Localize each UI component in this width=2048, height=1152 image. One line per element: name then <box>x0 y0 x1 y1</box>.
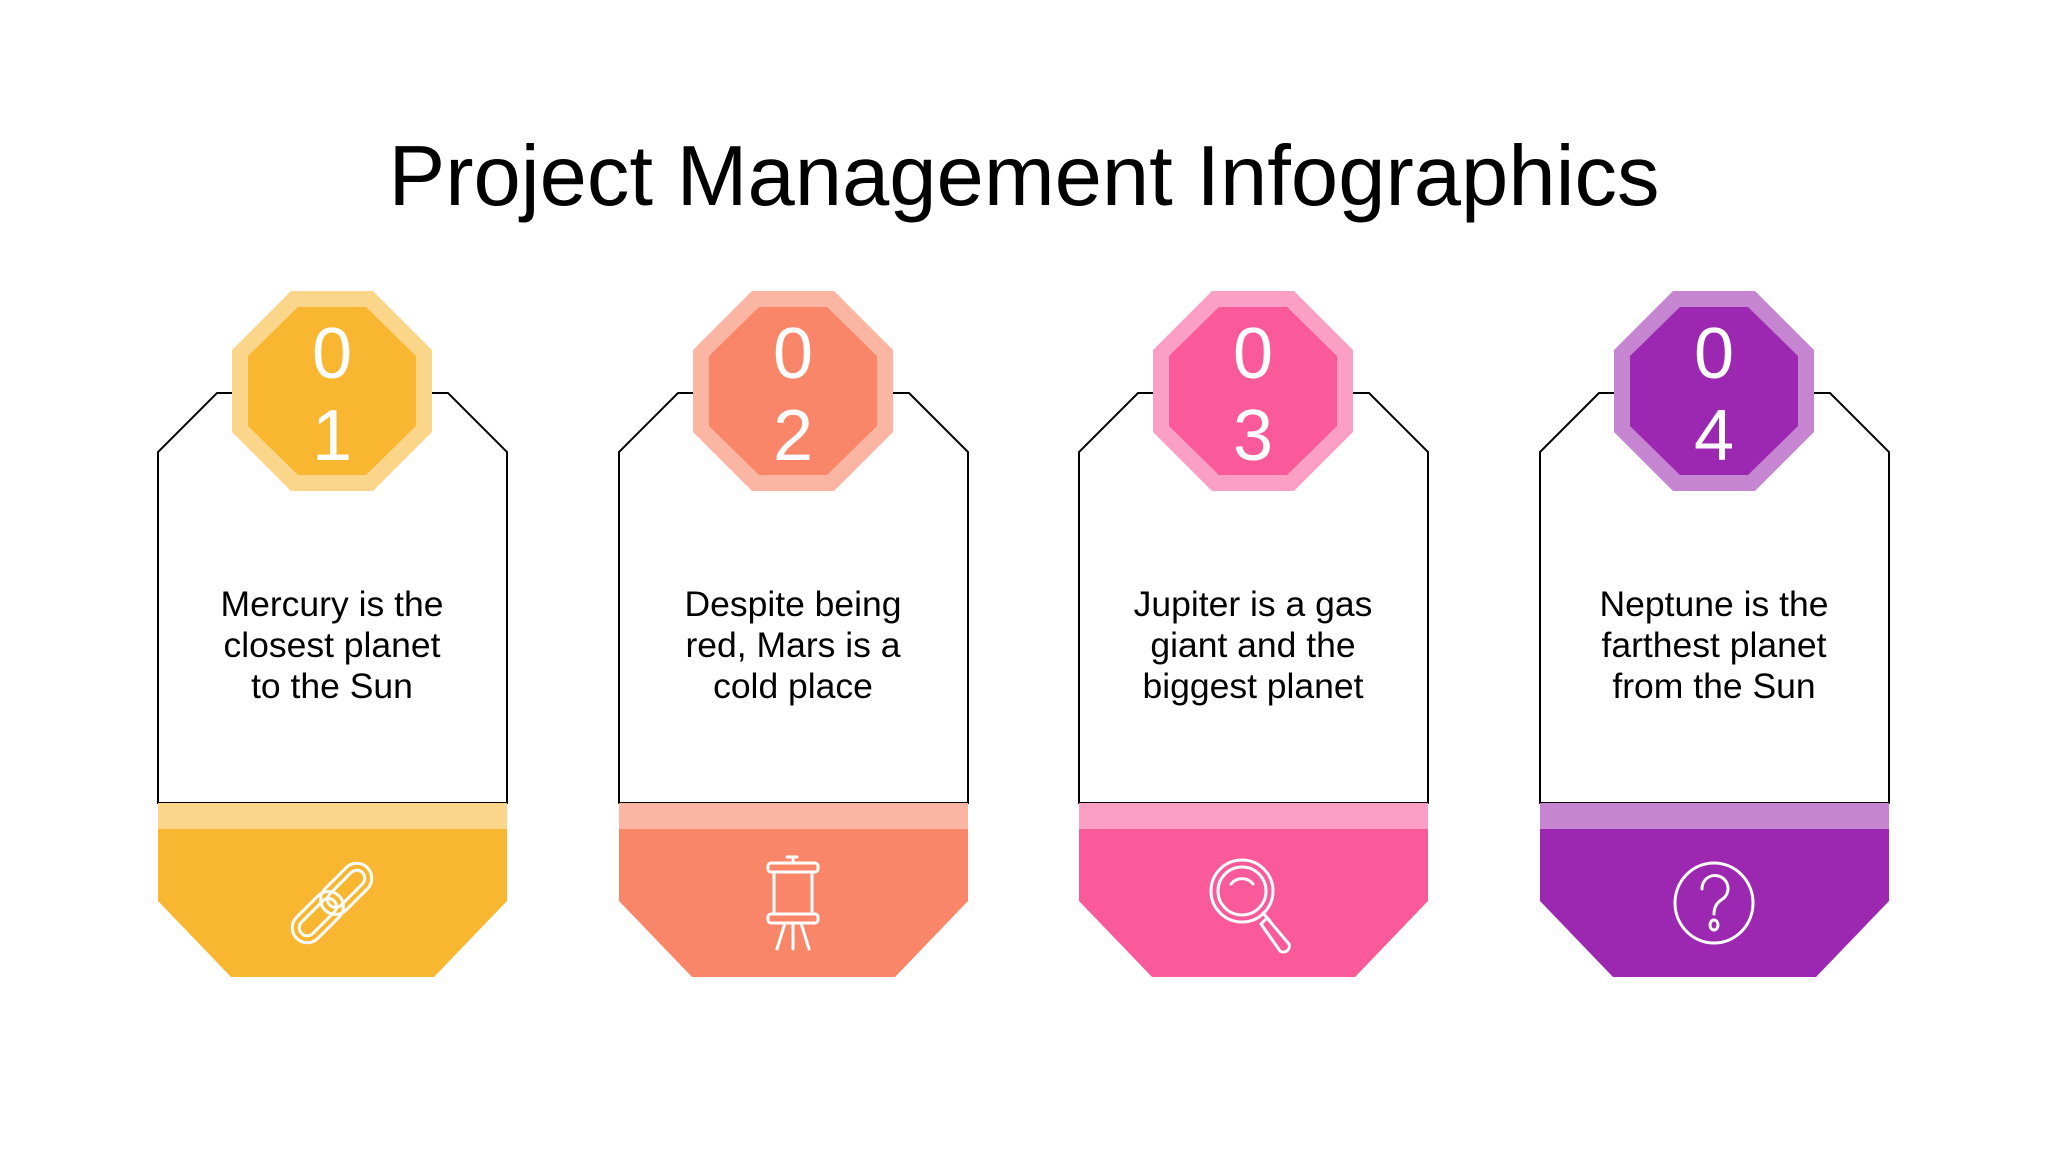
light band <box>619 803 968 829</box>
card 1 <box>158 291 507 977</box>
description text: Despite being <box>684 584 902 624</box>
description text: Jupiter is a gas <box>1134 584 1372 624</box>
icon: magnifying glass <box>1211 860 1289 952</box>
number badge 04: 4 <box>1694 396 1734 476</box>
bottom panel <box>1079 829 1428 977</box>
description text: cold place <box>713 666 873 706</box>
bottom panel <box>619 829 968 977</box>
card box <box>1079 393 1428 803</box>
number badge 04: 0 <box>1694 314 1734 394</box>
light band <box>158 803 507 829</box>
description text: to the Sun <box>251 666 413 706</box>
icon: question mark circle <box>1675 863 1753 943</box>
description text: farthest planet <box>1602 625 1827 665</box>
icon: chain link <box>286 857 378 949</box>
description text: from the Sun <box>1612 666 1816 706</box>
number badge 03 <box>1153 291 1353 491</box>
icon: presentation easel <box>768 857 818 949</box>
bottom panel <box>1540 829 1889 977</box>
number badge 04 <box>1614 291 1814 491</box>
number badge 01: 1 <box>312 396 352 476</box>
bottom panel <box>158 829 507 977</box>
description text: giant and the <box>1150 625 1356 665</box>
card 2 <box>619 291 968 977</box>
description text: Mercury is the <box>221 584 443 624</box>
number badge 02: 0 <box>773 314 813 394</box>
card box <box>619 393 968 803</box>
description text: red, Mars is a <box>685 625 901 665</box>
card box <box>1540 393 1889 803</box>
light band <box>1540 803 1889 829</box>
description text: Neptune is the <box>1600 584 1828 624</box>
description text: biggest planet <box>1142 666 1364 706</box>
card box <box>158 393 507 803</box>
number badge 01: 0 <box>312 314 352 394</box>
number badge 02 <box>693 291 893 491</box>
description text: closest planet <box>223 625 441 665</box>
number badge 02: 2 <box>773 396 813 476</box>
title: Project Management Infographics <box>389 129 1659 224</box>
number badge 01 <box>232 291 432 491</box>
light band <box>1079 803 1428 829</box>
card 4 <box>1540 291 1889 977</box>
number badge 03: 0 <box>1233 314 1273 394</box>
card 3 <box>1079 291 1428 977</box>
number badge 03: 3 <box>1233 396 1273 476</box>
